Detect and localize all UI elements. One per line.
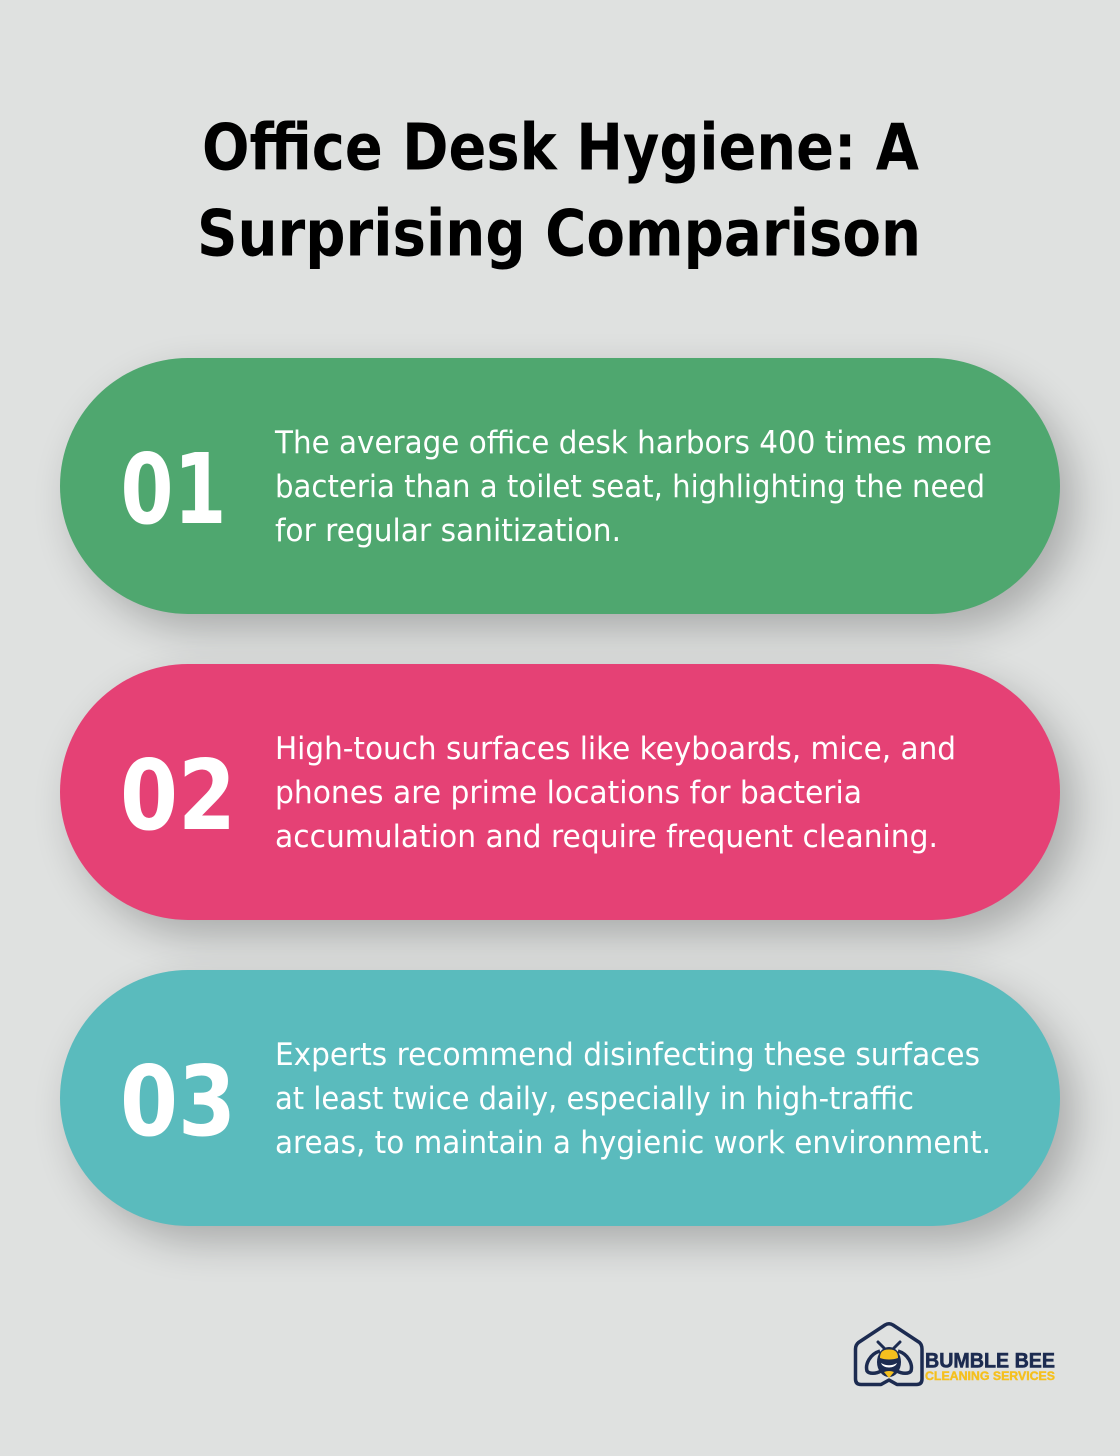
text: step 01 description: The average office desk harbors 400 times more [274, 425, 992, 461]
logo wordmark: BUMBLE BEE [925, 1350, 1055, 1372]
text: step 02 description: High-touch surfaces like keyboards, mice, and [275, 731, 956, 767]
title [197, 112, 921, 272]
text: step 01 description: for regular sanitization. [275, 513, 621, 549]
logo: Bumble Bee Cleaning Services [854, 1322, 1055, 1386]
number 02: 02 [120, 739, 236, 852]
panel: step 01 [60, 358, 1060, 614]
text: step 01 description [274, 425, 992, 549]
number 03: 03 [120, 1045, 236, 1158]
text: step 03 description: at least twice daily, especially in high-traffic [275, 1081, 914, 1117]
number 01: 01 [120, 433, 226, 546]
text: step 01 description: bacteria than a toilet seat, highlighting the need [275, 469, 985, 505]
panel: step 02 [60, 664, 1060, 920]
text: step 02 description: phones are prime locations for bacteria [275, 775, 862, 811]
text: step 02 description: accumulation and require frequent cleaning. [275, 819, 938, 855]
text: step 02 description [275, 731, 956, 855]
logo tagline: CLEANING SERVICES [925, 1369, 1055, 1383]
icon: house outline with bee [856, 1324, 922, 1384]
text: step 03 description: areas, to maintain a hygienic work environment. [275, 1125, 991, 1161]
text: step 03 description [275, 1037, 991, 1161]
text: step 03 description: Experts recommend disinfecting these surfaces [275, 1037, 980, 1073]
panel: step 03 [60, 970, 1060, 1226]
